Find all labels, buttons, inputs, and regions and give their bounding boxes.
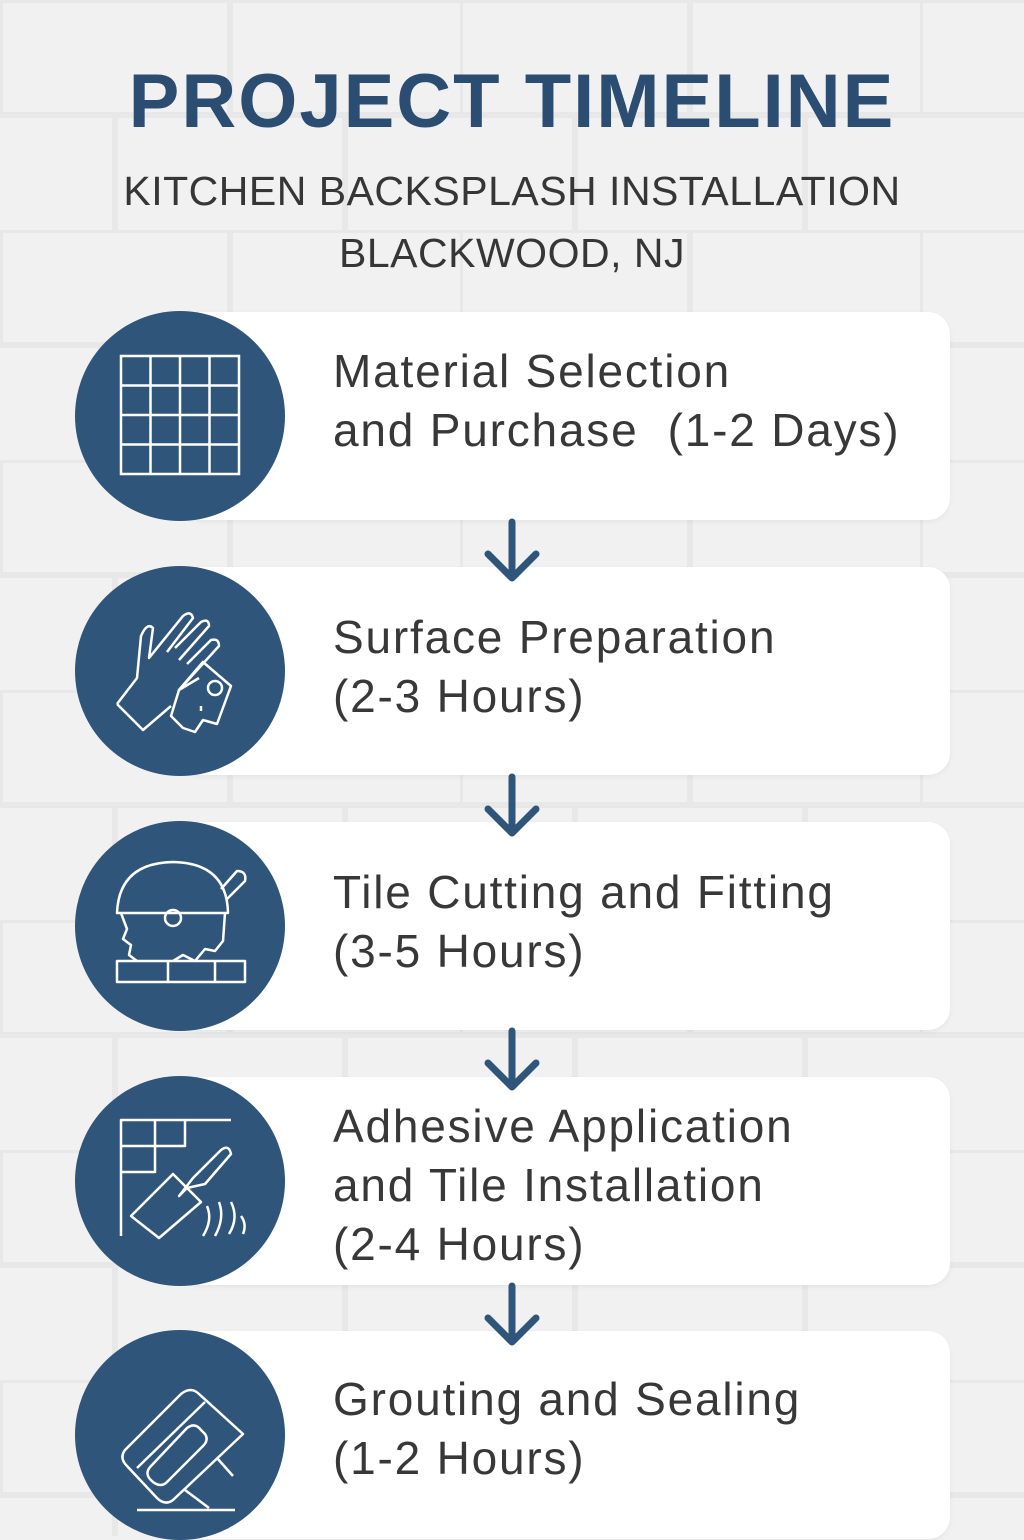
text step 4: Adhesive Application [333,1100,794,1152]
text step 4: and Tile Installation [333,1159,765,1211]
arrow 4 [484,1282,540,1346]
card: step 5 [180,1331,950,1539]
icon: circular saw [75,821,285,1031]
text step 3 [333,866,835,977]
text step 4: (2-4 Hours) [333,1218,585,1270]
text step 5: Grouting and Sealing [333,1373,801,1425]
text step 1 [333,345,900,456]
text step 2: (2-3 Hours) [333,670,585,722]
card: step 3 [180,822,950,1030]
icon: tile grid [75,311,285,521]
text step 3: Tile Cutting and Fitting [333,866,835,918]
text step 5: (1-2 Hours) [333,1432,585,1484]
text step 5 [333,1373,801,1484]
text step 1: and Purchase (1-2 Days) [333,404,900,456]
text step 1: Material Selection [333,345,731,397]
title: PROJECT TIMELINE [129,59,895,144]
icon: hand sanding [75,566,285,776]
icon: grout float [75,1330,285,1540]
text step 3: (3-5 Hours) [333,925,585,977]
icon: trowel adhesive [75,1076,285,1286]
card: step 1 [180,312,950,520]
subtitle: BLACKWOOD, NJ [339,230,685,276]
text step 2 [333,611,776,722]
arrow 3 [484,1028,540,1090]
card: step 2 [180,567,950,775]
arrow 1 [484,518,540,582]
arrow 2 [484,774,540,836]
subtitle: KITCHEN BACKSPLASH INSTALLATION [123,168,901,214]
text step 2: Surface Preparation [333,611,776,663]
subtitle [123,168,901,276]
card: step 4 [180,1077,950,1285]
text step 4 [333,1100,794,1270]
